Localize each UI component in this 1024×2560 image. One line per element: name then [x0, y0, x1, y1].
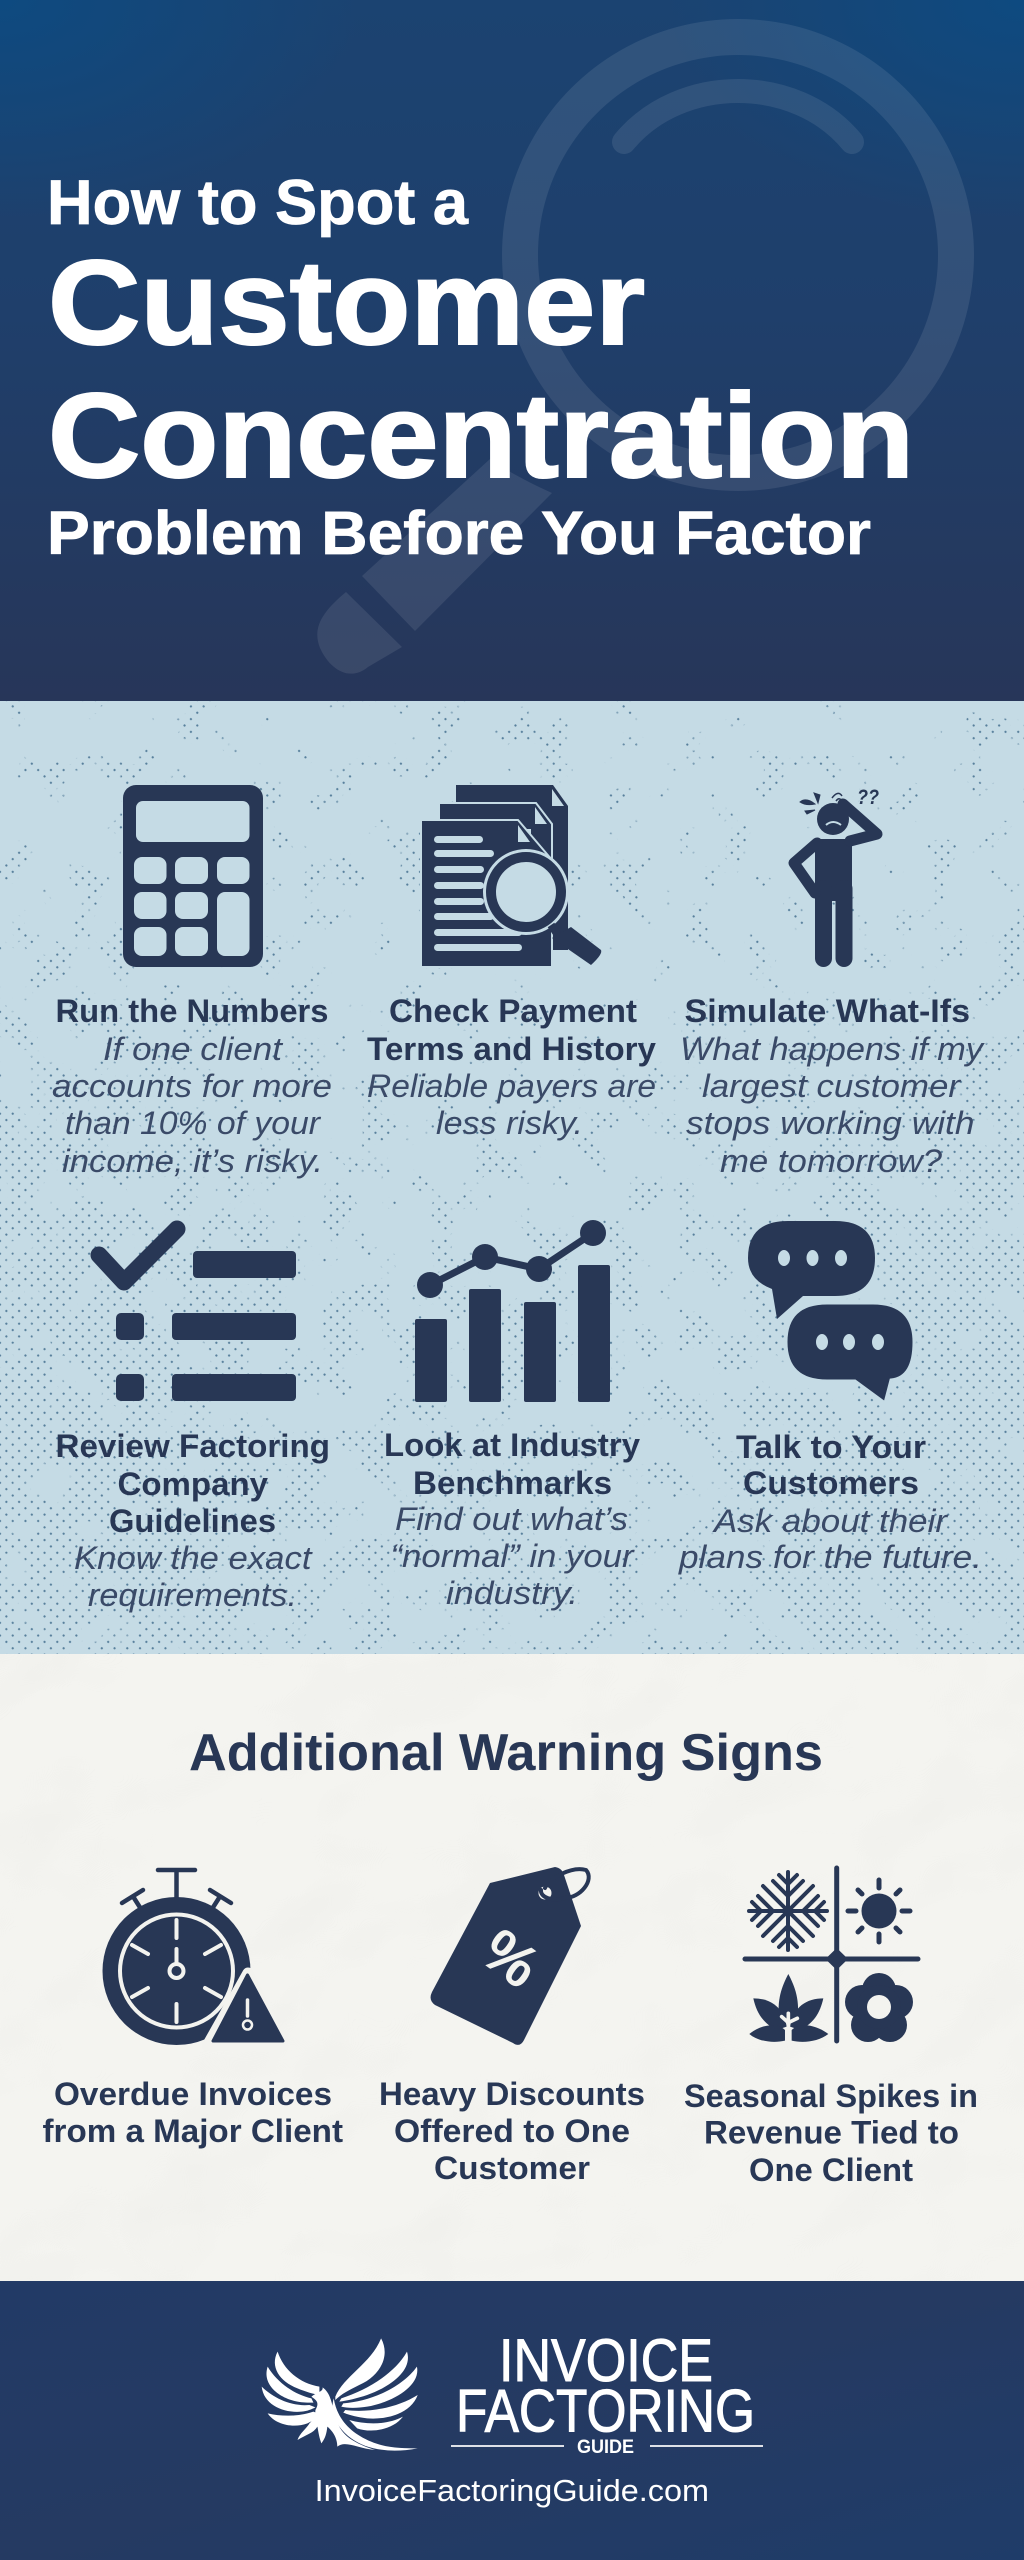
- description: Know the exact: [74, 1540, 313, 1576]
- panel: footer: [0, 2281, 1024, 2560]
- label: [42, 2076, 343, 2149]
- icon: price tag with percent: %: [469, 1916, 552, 2001]
- description: [52, 1031, 332, 1179]
- description: Ask about their: [712, 1503, 948, 1539]
- heading: [367, 993, 656, 1067]
- logo wordmark: FACTORING: [456, 2378, 755, 2445]
- icon: price tag with percent: [431, 1867, 589, 2045]
- title: Concentration: [48, 369, 914, 503]
- description: [390, 1501, 635, 1611]
- heading: Review Factoring: [56, 1428, 330, 1464]
- card: overdue invoices: [42, 1870, 343, 2149]
- description: income, it’s risky.: [62, 1143, 323, 1179]
- icon: speech bubbles: [748, 1221, 914, 1403]
- title: Customer: [48, 236, 645, 370]
- description: plans for the future.: [678, 1539, 982, 1575]
- description: industry.: [446, 1575, 578, 1611]
- card: simulate what-ifs: [680, 786, 985, 1179]
- heading: Talk to Your: [736, 1429, 926, 1465]
- heading: Check Payment: [389, 993, 637, 1029]
- icon: calculator: [123, 785, 263, 967]
- description: largest customer: [702, 1068, 961, 1104]
- description: requirements.: [88, 1577, 297, 1613]
- card: check payment terms: [367, 785, 656, 1141]
- website url: InvoiceFactoringGuide.com: [315, 2473, 709, 2508]
- card: run the numbers: [52, 785, 332, 1179]
- card: seasonal spikes: [684, 1868, 978, 2188]
- description: accounts for more: [52, 1068, 332, 1104]
- description: Reliable payers are: [367, 1068, 656, 1104]
- heading: [56, 1428, 330, 1539]
- title: How to Spot a: [47, 168, 469, 238]
- panel: additional warning signs: [0, 1654, 1024, 2281]
- card: review factoring company guidelines: [56, 1229, 330, 1613]
- description: “normal” in your: [390, 1538, 635, 1574]
- description: than 10% of your: [65, 1105, 321, 1141]
- label: [379, 2076, 645, 2186]
- heading: [384, 1427, 640, 1501]
- icon: bar chart with trend line: [415, 1220, 610, 1402]
- description: What happens if my: [680, 1031, 985, 1067]
- heading: [736, 1429, 926, 1501]
- description: [74, 1540, 313, 1613]
- label: Revenue Tied to: [704, 2114, 959, 2150]
- label: from a Major Client: [42, 2113, 343, 2149]
- icon: magnifying glass watermark: [317, 19, 974, 674]
- icon: documents with magnifier: [421, 785, 601, 967]
- logo wordmark: GUIDE: [577, 2437, 634, 2458]
- label: Seasonal Spikes in: [684, 2078, 978, 2114]
- panel: header: [0, 0, 1024, 701]
- title: [47, 168, 914, 567]
- description: [678, 1503, 982, 1575]
- description: [680, 1031, 985, 1179]
- heading: Simulate What-Ifs: [684, 993, 970, 1029]
- heading: Additional Warning Signs: [189, 1724, 823, 1782]
- card: talk to your customers: [678, 1221, 982, 1575]
- heading: Company: [118, 1466, 268, 1502]
- icon: stopwatch with warning triangle: [102, 1870, 283, 2046]
- label: Heavy Discounts: [379, 2076, 645, 2112]
- description: Find out what’s: [395, 1501, 628, 1537]
- heading: Terms and History: [367, 1031, 656, 1067]
- description: less risky.: [436, 1105, 583, 1141]
- heading: Look at Industry: [384, 1427, 640, 1463]
- heading: Customers: [743, 1465, 919, 1501]
- card: heavy discounts: [379, 1867, 645, 2186]
- heading: Benchmarks: [413, 1465, 612, 1501]
- icon: confused person: [794, 786, 879, 967]
- icon: checklist: [99, 1229, 296, 1401]
- description: me tomorrow?: [720, 1143, 942, 1179]
- logo wordmark: INVOICE: [499, 2327, 713, 2394]
- label: Offered to One: [394, 2113, 630, 2149]
- heading: Run the Numbers: [56, 993, 328, 1029]
- panel: checks grid: [0, 701, 1024, 1654]
- icon: four seasons: [745, 1868, 918, 2042]
- label: [684, 2078, 978, 2188]
- logo wordmark: [451, 2327, 763, 2458]
- icon: confused person: ??: [857, 786, 879, 809]
- heading: Guidelines: [109, 1503, 276, 1539]
- description: If one client: [103, 1031, 283, 1067]
- label: One Client: [749, 2152, 913, 2188]
- icon: eagle logo: [262, 2338, 418, 2451]
- card: look at industry benchmarks: [384, 1220, 640, 1611]
- label: Customer: [434, 2150, 590, 2186]
- label: Overdue Invoices: [54, 2076, 332, 2112]
- description: [367, 1068, 656, 1141]
- title: Problem Before You Factor: [47, 499, 871, 567]
- description: stops working with: [686, 1105, 974, 1141]
